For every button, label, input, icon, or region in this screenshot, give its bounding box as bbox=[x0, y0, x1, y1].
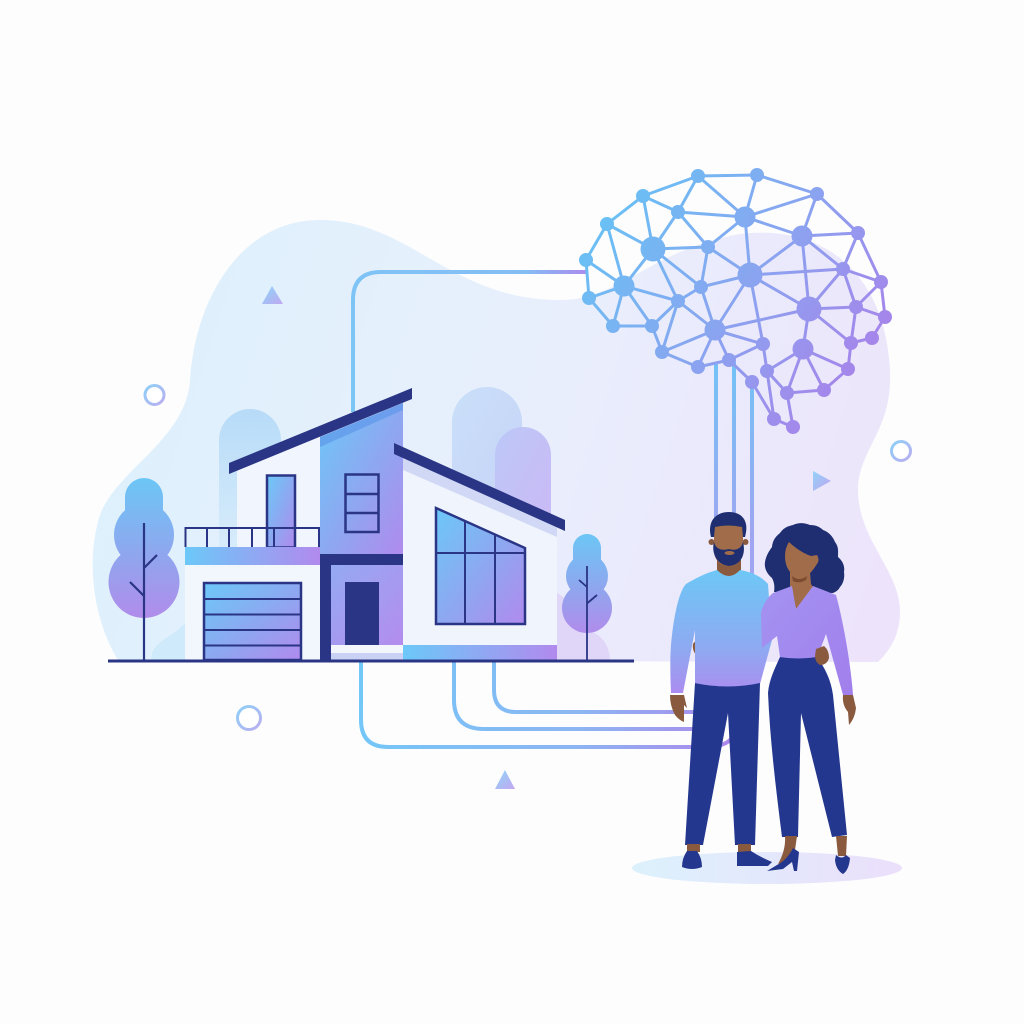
man mouth bbox=[724, 551, 734, 555]
tower window bbox=[345, 474, 379, 532]
man neck bbox=[717, 560, 741, 577]
garage door bbox=[204, 583, 301, 660]
man ankles bbox=[687, 844, 751, 852]
man hand on woman waist bbox=[815, 646, 829, 665]
right tree bbox=[562, 534, 612, 661]
right wing roof shade bbox=[403, 458, 557, 537]
man beard bbox=[713, 542, 744, 566]
woman hair bbox=[765, 523, 844, 593]
background arches bbox=[151, 387, 610, 660]
brain nodes bbox=[579, 168, 892, 434]
woman bbox=[761, 523, 856, 874]
man left shoe bbox=[682, 851, 702, 869]
house bbox=[185, 388, 565, 661]
connector lines bbox=[353, 272, 752, 747]
balcony door bbox=[267, 476, 295, 548]
tower roof shade bbox=[320, 403, 403, 447]
left tree bbox=[108, 478, 180, 661]
entry beam and pillar bbox=[320, 554, 403, 661]
man trousers bbox=[685, 683, 760, 845]
man face bbox=[714, 524, 743, 566]
AI brain network bbox=[579, 168, 892, 434]
man left hand bbox=[670, 695, 687, 722]
man sweater bbox=[670, 570, 772, 693]
man hand behind woman bbox=[693, 640, 704, 655]
right wing base bbox=[403, 645, 557, 660]
woman heel shoe bbox=[767, 848, 799, 871]
background blob bbox=[93, 220, 900, 662]
garage wall bbox=[185, 565, 320, 661]
brain connections bbox=[586, 175, 885, 427]
front steps bbox=[331, 645, 403, 660]
man hair bbox=[710, 512, 746, 537]
woman face bbox=[785, 542, 818, 578]
woman right shoe bbox=[835, 855, 850, 874]
woman blouse bbox=[761, 586, 853, 695]
large window bbox=[436, 508, 525, 624]
right wing wall bbox=[403, 462, 557, 660]
man right shoe bbox=[737, 851, 772, 866]
man bbox=[670, 512, 772, 869]
ground line bbox=[108, 660, 634, 662]
front door bbox=[345, 582, 379, 645]
man ears bbox=[708, 539, 748, 545]
balcony slab bbox=[185, 547, 320, 565]
woman chin shadow bbox=[792, 574, 808, 582]
balcony railing bbox=[186, 528, 319, 547]
right roof bbox=[394, 443, 565, 531]
woman ankles bbox=[778, 836, 847, 864]
blue tower bbox=[320, 403, 403, 556]
woman trousers bbox=[768, 657, 847, 837]
ground shadow under people bbox=[632, 852, 902, 884]
woman right hand bbox=[843, 695, 856, 725]
upper white wall bbox=[237, 436, 320, 548]
woman neck and chest bbox=[790, 572, 815, 612]
decorative shapes bbox=[145, 286, 910, 789]
upper roof bbox=[229, 388, 412, 474]
entry surround bbox=[331, 565, 403, 646]
